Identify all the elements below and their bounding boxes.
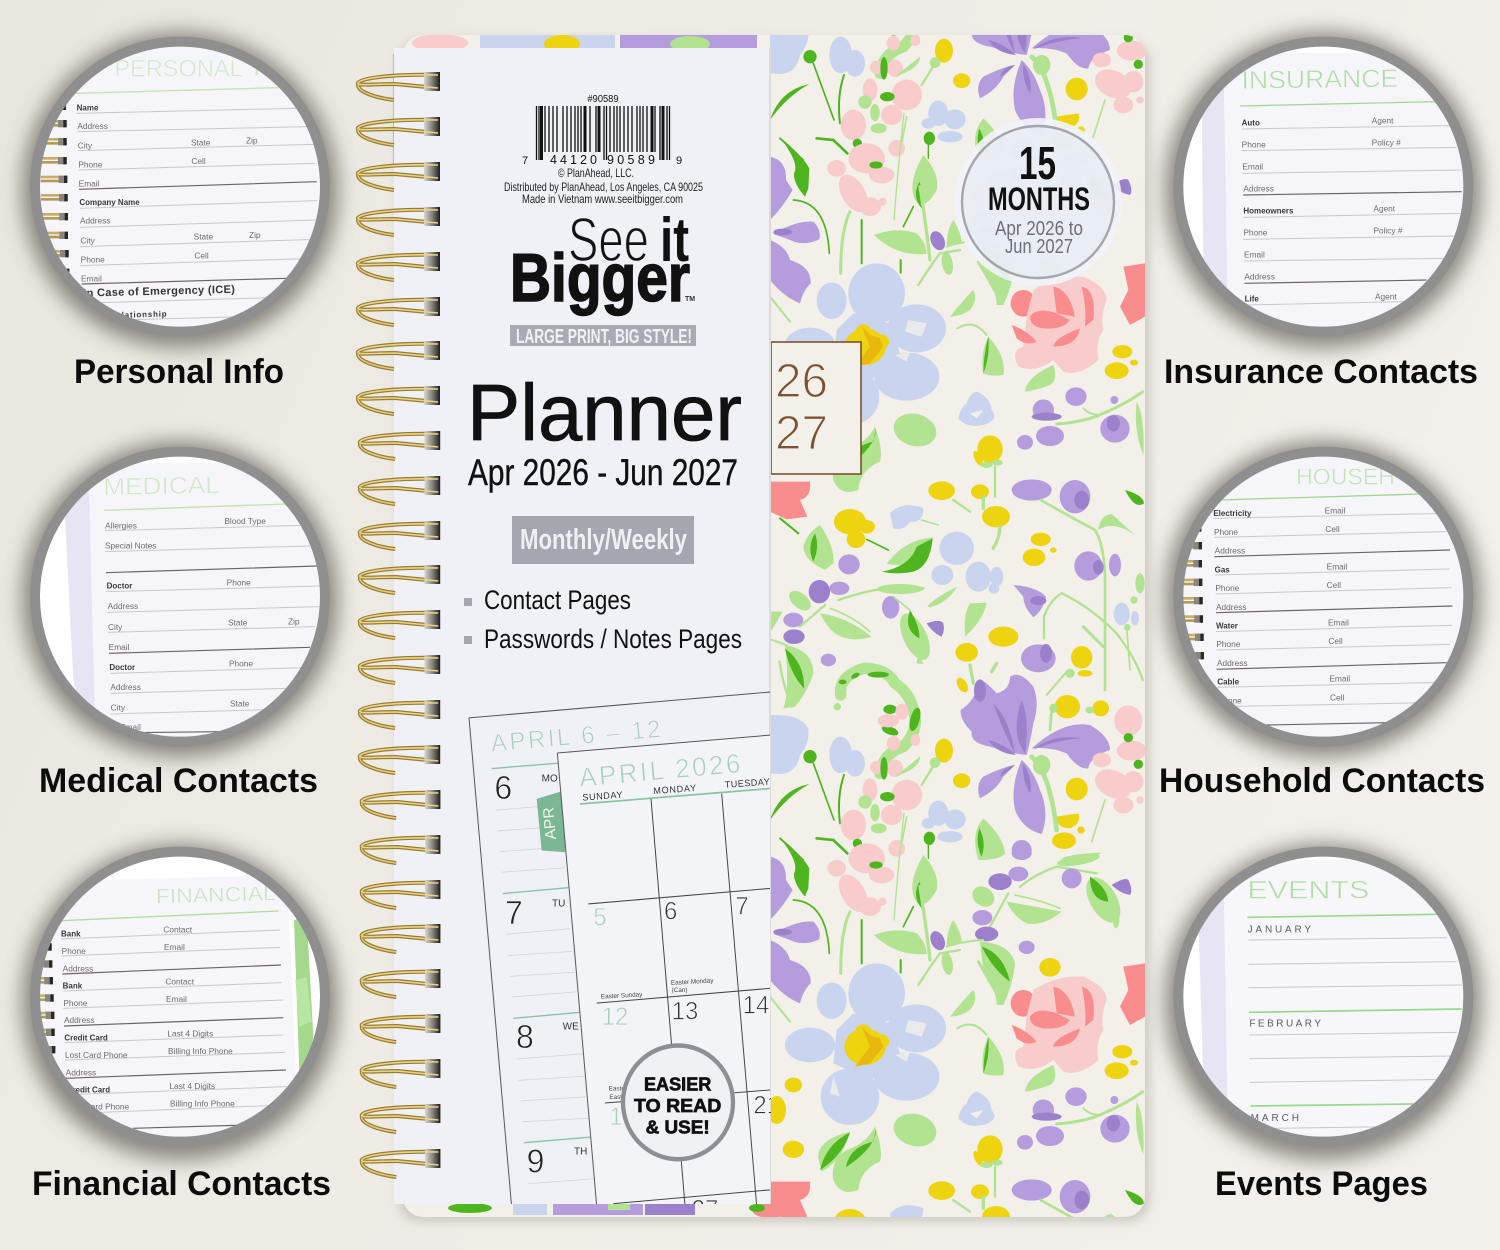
monthly page: 13 — [672, 998, 698, 1025]
panel: household circle: Address — [1215, 546, 1245, 556]
legal text: Made in Vietnam www.seeitbigger.com — [522, 192, 683, 206]
panel: personal info circle: Email — [81, 273, 102, 283]
cover edge strips behind band — [412, 34, 788, 1218]
weekly page: 9 — [527, 1143, 544, 1180]
cover date box — [771, 342, 861, 474]
monthly page: Easter Sunday — [601, 991, 643, 1001]
panel: household circle: Address — [1216, 602, 1247, 612]
logo: See it Bigger: Bigger — [510, 240, 690, 316]
panel: household circle: Phone — [1214, 527, 1238, 537]
label: financial contacts: Financial Contacts — [32, 1165, 331, 1203]
panel: medical circle: State — [228, 618, 248, 628]
weekly page: WE — [563, 1022, 579, 1033]
panel: household circle: Cable — [1217, 678, 1240, 687]
weekly page: 8 — [516, 1018, 534, 1055]
panel: financial circle: Email — [164, 942, 185, 952]
panel: personal info circle: Address — [80, 216, 111, 226]
monthly page: APRIL 2026 — [578, 748, 742, 793]
logo: See it Bigger: it — [660, 206, 689, 275]
monthly page: (Can) — [672, 987, 688, 994]
panel: financial circle — [20, 840, 340, 1160]
panel: household circle — [1160, 440, 1481, 760]
panel: financial circle: FINANCIAL — [156, 882, 276, 908]
panel: insurance circle: Address — [1244, 271, 1275, 281]
panel: insurance circle: Email — [1242, 162, 1263, 172]
panel: financial circle: Address — [63, 963, 93, 973]
barcode block: 90589 — [607, 153, 655, 167]
label: events pages: Events Pages — [1215, 1165, 1428, 1203]
monthly page: 27 — [692, 1196, 718, 1224]
panel: medical circle: Zip — [288, 616, 300, 626]
monthly weekly badge: Monthly/Weekly — [520, 524, 687, 556]
panel: personal info circle: Company Name — [79, 198, 140, 207]
badge: easier to read: TO READ — [634, 1095, 721, 1116]
barcode block: 7 — [522, 155, 528, 167]
panel: events circle: MARCH — [1251, 1113, 1299, 1124]
sticker: 15 months: MONTHS — [988, 181, 1090, 217]
panel: personal info circle: I — [253, 54, 260, 81]
panel: insurance circle: INSURANCE — [1241, 65, 1398, 95]
monthly page: MONDAY — [653, 783, 696, 796]
panel: insurance circle: Policy # — [1373, 225, 1403, 235]
monthly page: SUNDAY — [582, 790, 623, 803]
feature list: Passwords / Notes Pages — [484, 624, 742, 654]
panel: household circle: Water — [1216, 621, 1238, 630]
panel: medical circle: Allergies — [105, 520, 137, 530]
sticker: 15 months: Jun 2027 — [1005, 236, 1073, 258]
panel: household circle: Phone — [1218, 695, 1242, 705]
weekly page: TU — [552, 898, 565, 909]
panel: household circle: Cell — [1325, 524, 1340, 534]
panel: personal info circle: PERSONAL — [114, 56, 243, 83]
panel: insurance circle: Agent — [1373, 204, 1396, 214]
cover date box: 26 — [775, 355, 828, 408]
panel: insurance circle: Agent — [1372, 115, 1394, 125]
panel: financial circle: Address — [66, 1067, 96, 1077]
monthly page: 7 — [735, 893, 749, 920]
panel: household circle: Cell — [1327, 580, 1341, 590]
weekly page: TH — [574, 1147, 587, 1158]
panel: personal info circle: State — [191, 137, 211, 147]
panel: personal info circle: Phone — [81, 254, 105, 264]
panel: financial circle: Bank — [63, 981, 83, 990]
monthly page: 21 — [753, 1092, 780, 1119]
label: household contacts: Household Contacts — [1159, 762, 1485, 800]
panel: events circle: JANUARY — [1248, 925, 1311, 936]
panel: personal info circle: Cell — [191, 156, 206, 166]
feature list: Contact Pages — [484, 585, 631, 615]
panel: events circle: FEBRUARY — [1249, 1019, 1321, 1030]
panel: personal info circle: Cell — [194, 250, 209, 260]
weekly page: APR — [541, 806, 560, 840]
panel: household circle: HOUSEH — [1296, 463, 1395, 489]
panel: insurance circle: Email — [1244, 250, 1265, 260]
floral cover — [403, 0, 1147, 1248]
legal text: Distributed by PlanAhead, Los Angeles, CA 90025 — [504, 180, 703, 194]
panel: personal info circle: In Case of Emergency (ICE) — [83, 284, 235, 300]
panel: personal info circle: City — [78, 141, 93, 151]
feature list — [464, 585, 742, 654]
weekly page: APRIL 6 – 12 — [490, 716, 662, 758]
monthly page: Easter — [609, 1094, 628, 1101]
barcode block: 9 — [676, 155, 682, 167]
barcode block: 44120 — [550, 153, 597, 167]
weekly page: 7 — [505, 894, 523, 931]
panel: personal info circle: Zip — [246, 136, 258, 146]
panel: medical circle: Email — [120, 722, 141, 732]
panel: household circle: Email — [1329, 674, 1350, 684]
panel: financial circle: Email — [166, 994, 187, 1004]
panel: financial circle: Lost Card Phone — [67, 1101, 130, 1111]
panel: household circle: Email — [1328, 617, 1349, 627]
panel: financial circle: Contact — [165, 976, 195, 986]
date range: Apr 2026 - Jun 2027 — [468, 452, 738, 493]
panel: household circle: Gas — [1215, 565, 1230, 574]
panel: insurance circle: Life — [1245, 294, 1259, 303]
panel: financial circle: Last 4 Digits — [169, 1081, 215, 1091]
panel: household circle: Email — [1327, 561, 1348, 571]
panel: financial circle: Credit Card — [67, 1085, 110, 1094]
monthly weekly badge — [512, 516, 694, 564]
panel: insurance circle: Policy # — [1372, 138, 1401, 148]
panel: financial circle: Last 4 Digits — [167, 1028, 213, 1038]
panel: medical circle: Doctor — [107, 582, 132, 591]
panel: financial circle: Bank — [61, 930, 81, 939]
badge: easier to read — [623, 1046, 733, 1159]
logo: See it Bigger: TM — [685, 296, 695, 303]
spiral binding — [358, 72, 440, 1177]
pink page edge — [393, 54, 396, 164]
planner page previews — [469, 692, 780, 1224]
panel: financial circle: Billing Info Phone — [168, 1046, 233, 1056]
monthly page: 19 — [609, 1104, 636, 1131]
panel: events circle — [1160, 840, 1481, 1160]
panel: medical circle: Blood Type — [224, 516, 266, 526]
legal text — [504, 166, 703, 206]
monthly page: 14 — [743, 992, 769, 1020]
barcode block — [522, 94, 682, 167]
monthly page: 5 — [593, 904, 607, 931]
panel: household circle: Email — [1325, 505, 1346, 515]
panel: medical circle: Doctor — [109, 663, 135, 672]
monthly page: Easter Monday — [671, 977, 714, 987]
panel: personal info circle: State — [194, 231, 213, 241]
panel: financial circle: Phone — [62, 946, 86, 956]
book shadow — [398, 40, 1150, 1222]
panel: household circle: Phone — [1215, 583, 1240, 593]
panel: medical circle: Phone — [229, 658, 253, 668]
panel: medical circle: City — [111, 703, 126, 713]
barcode block: #90589 — [588, 94, 619, 105]
panel: household circle: Cell — [1330, 693, 1344, 703]
panel: medical circle: Address — [108, 601, 138, 611]
panel: personal info circle: Email — [79, 178, 100, 188]
panel: insurance circle: Phone — [1242, 140, 1266, 150]
weekly page: 6 — [494, 770, 512, 806]
panel: insurance circle: Homeowners — [1243, 206, 1294, 215]
panel: insurance circle: Auto — [1242, 119, 1260, 128]
panel: medical circle — [20, 440, 340, 760]
panel: medical circle: Email — [109, 642, 130, 652]
panel: medical circle: State — [230, 699, 250, 709]
panel: household circle: Phone — [1216, 639, 1241, 649]
panel: personal info circle — [20, 30, 340, 350]
label: personal info: Personal Info — [74, 353, 284, 391]
banner: large print — [510, 325, 696, 348]
panel: personal info circle: Phone — [78, 159, 103, 169]
weekly page: MO — [542, 773, 558, 785]
legal text: © PlanAhead, LLC. — [558, 166, 634, 180]
panel: personal info circle: Relationship — [110, 310, 167, 320]
monthly page: TUESDAY — [724, 776, 770, 790]
panel: financial circle: Address — [64, 1015, 95, 1025]
banner: large print: LARGE PRINT, BIG STYLE! — [516, 326, 692, 348]
label: medical contacts: Medical Contacts — [39, 762, 318, 800]
panel: insurance circle: Address — [1243, 184, 1274, 194]
monthly page: Easter — [609, 1086, 628, 1093]
panel: household circle: Cell — [1328, 636, 1343, 646]
panel: medical circle: City — [108, 622, 123, 632]
panel: financial circle: Phone — [63, 998, 88, 1008]
monthly page — [557, 735, 780, 1224]
panel: insurance circle: Agent — [1375, 291, 1397, 301]
sticker: 15 months — [954, 118, 1122, 286]
label: insurance contacts: Insurance Contacts — [1164, 353, 1478, 391]
sticker: 15 months: 15 — [1019, 137, 1056, 189]
panel: personal info circle: Zip — [249, 230, 261, 240]
panel: financial circle: Lost Card Phone — [65, 1050, 128, 1060]
monthly page: 6 — [664, 898, 677, 926]
white belly band — [394, 48, 780, 1224]
sticker: 15 months: Apr 2026 to — [995, 218, 1083, 240]
panel: household circle: Electricity — [1213, 509, 1252, 518]
panel: household circle: Address — [1217, 658, 1248, 668]
monthly page: 12 — [602, 1004, 628, 1031]
panel: events circle: EVENTS — [1247, 876, 1369, 904]
panel: financial circle: Credit Card — [64, 1033, 108, 1042]
panel: insurance circle — [1160, 30, 1481, 350]
panel: insurance circle: Phone — [1243, 228, 1268, 238]
badge: easier to read: EASIER — [644, 1073, 711, 1095]
panel: personal info circle: Name — [77, 103, 99, 112]
planner title: Planner — [467, 368, 742, 457]
panel: financial circle: Contact — [163, 924, 193, 934]
logo: See it Bigger: See — [568, 206, 649, 275]
cover date box: 27 — [775, 407, 828, 460]
badge: easier to read: & USE! — [646, 1116, 710, 1137]
panel: medical circle: MEDICAL — [103, 472, 220, 501]
panel: personal info circle: City — [80, 235, 96, 245]
panel: medical circle: Address — [110, 682, 141, 692]
logo: See it Bigger — [510, 206, 695, 316]
panel: medical circle: Phone — [227, 577, 251, 587]
panel: medical circle: Special Notes — [105, 540, 156, 550]
panel: financial circle: Billing Info Phone — [170, 1099, 235, 1109]
weekly page — [469, 692, 770, 1207]
panel: personal info circle: Address — [77, 121, 108, 131]
